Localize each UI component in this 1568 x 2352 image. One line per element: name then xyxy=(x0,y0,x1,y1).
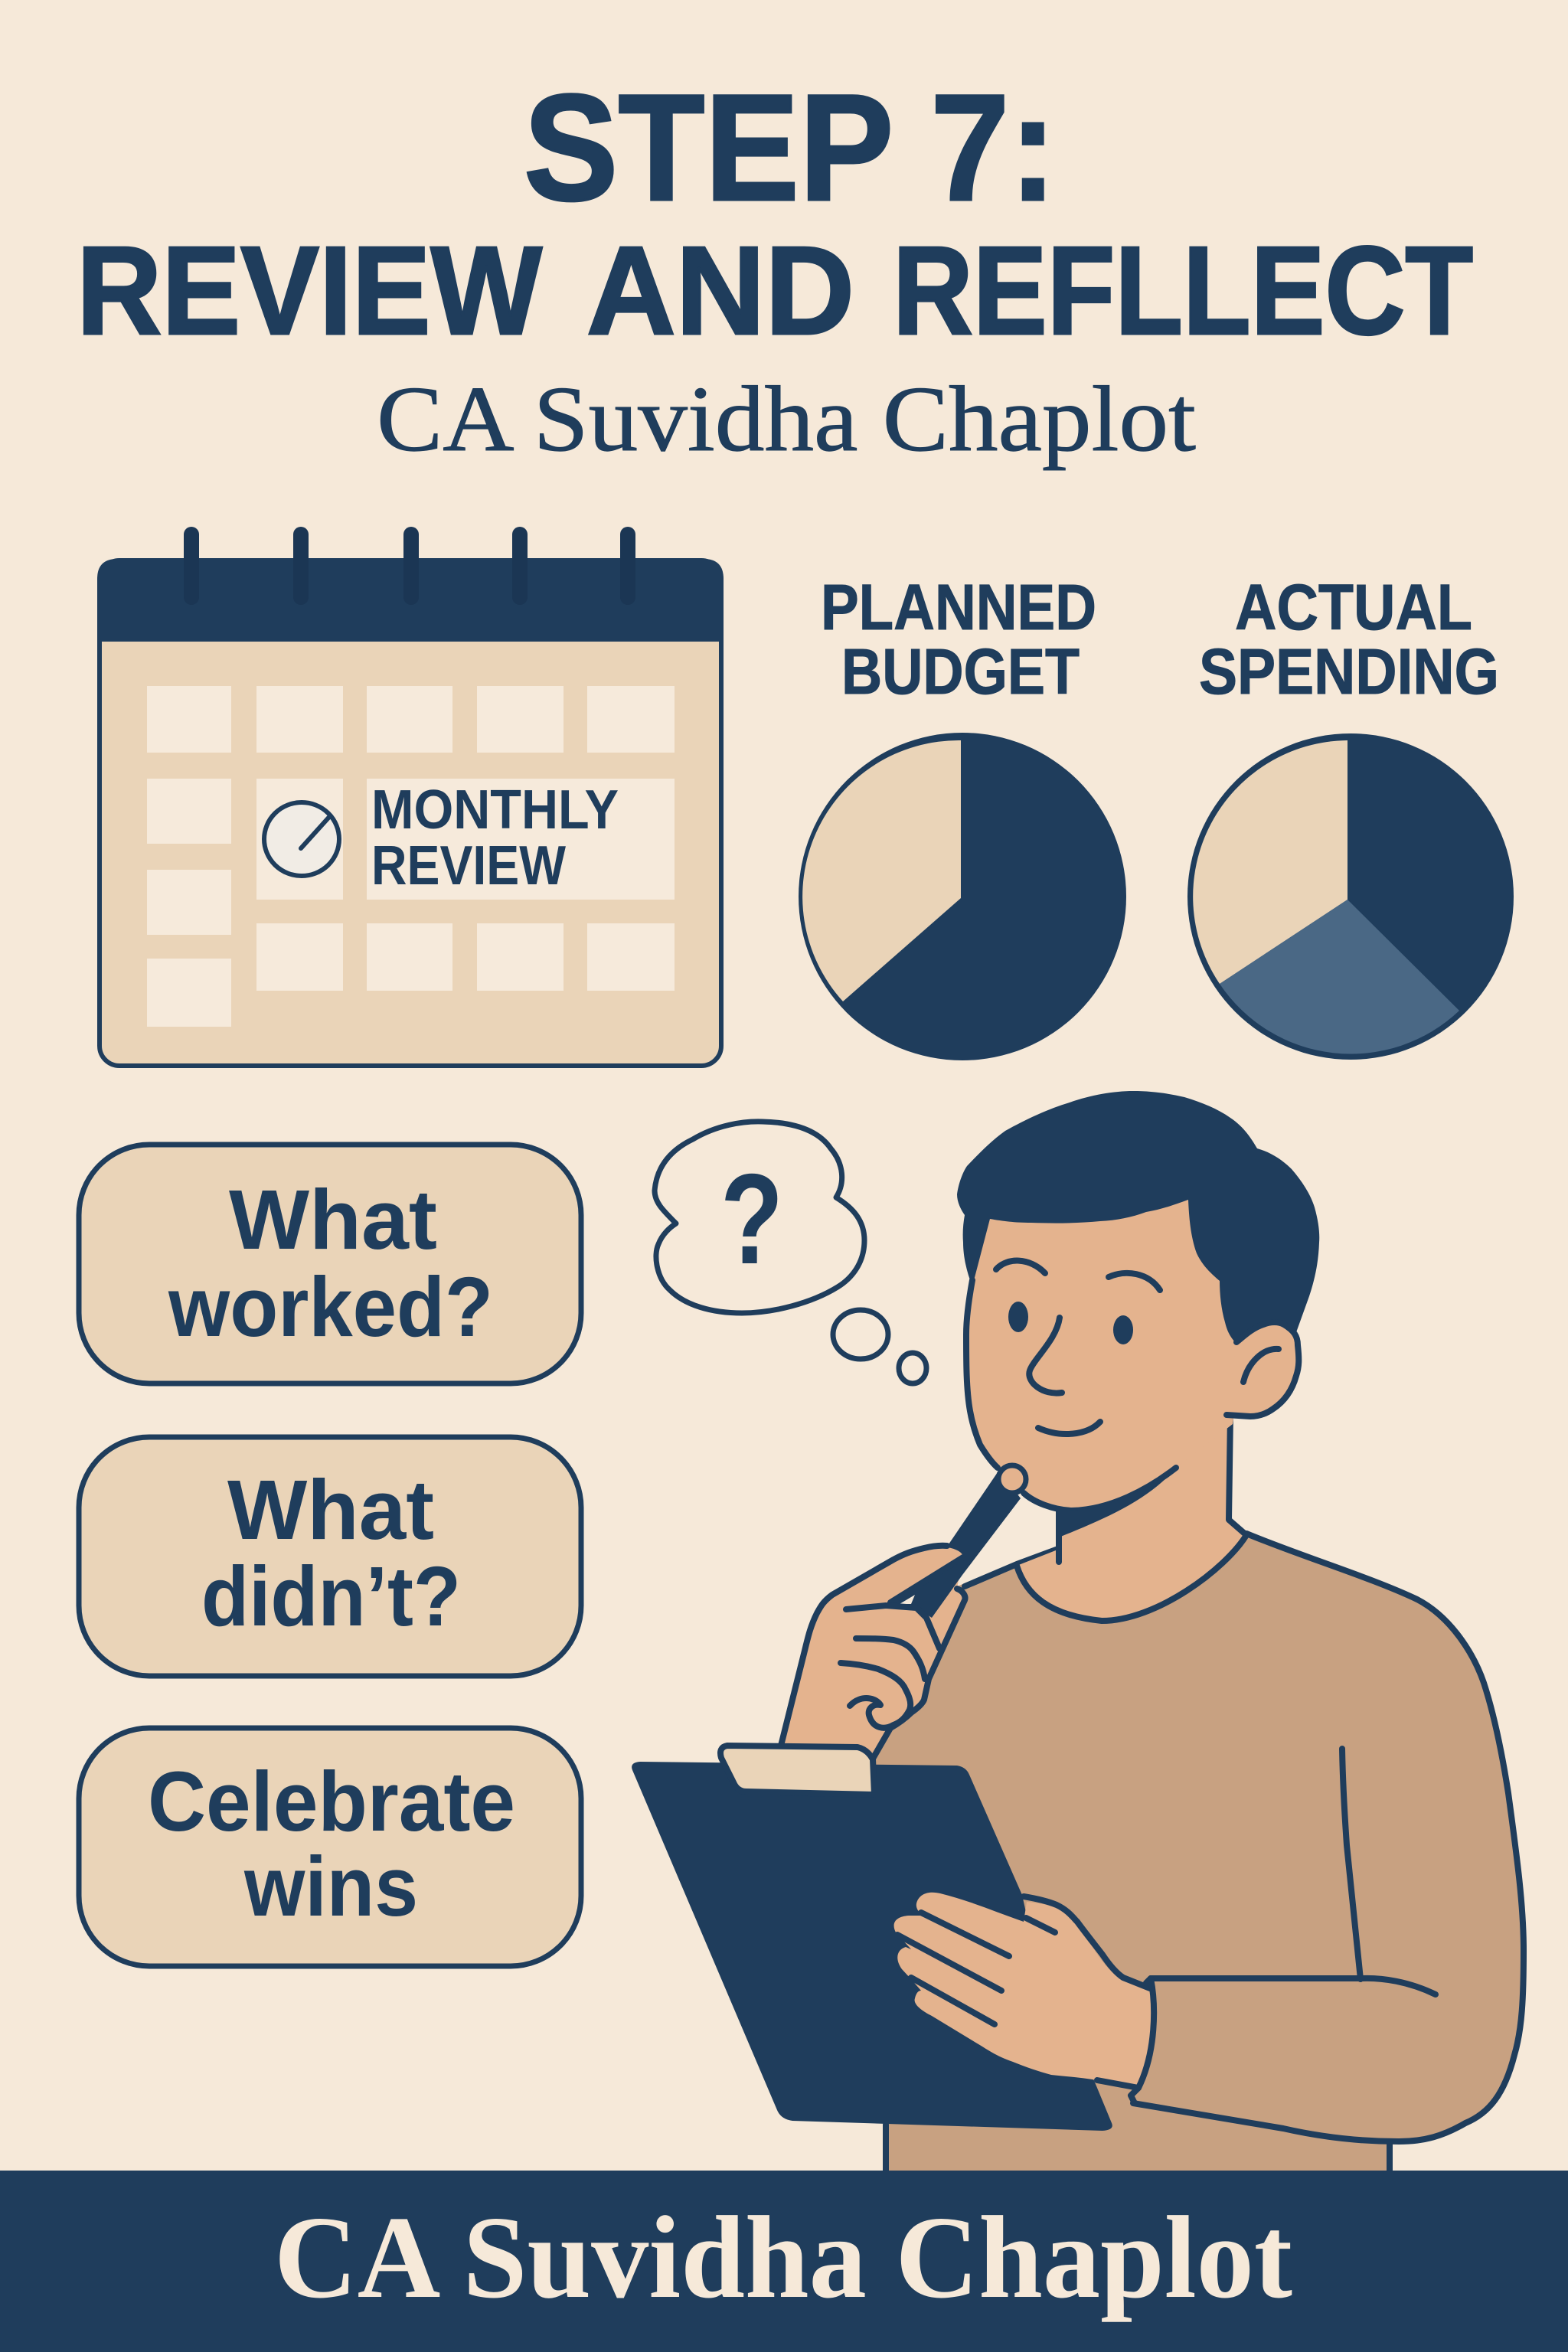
sleeve cuff xyxy=(1131,1978,1154,2103)
callout: what didn't: didn’t? xyxy=(201,1550,461,1644)
title: REFLLECT xyxy=(893,220,1473,361)
clipboard xyxy=(632,1746,1112,2131)
title: AND xyxy=(586,220,854,361)
icon: clock xyxy=(264,802,339,876)
pie chart: actual xyxy=(1187,733,1514,1060)
callout: celebrate wins: Celebrate xyxy=(148,1755,515,1849)
panel: actual spending pie xyxy=(1187,571,1514,1060)
title: REVIEW xyxy=(77,220,542,361)
label: actual spending xyxy=(1199,571,1499,707)
icon: thought bubble with question mark xyxy=(655,1122,926,1383)
pie chart: planned xyxy=(799,733,1126,1060)
ear xyxy=(1227,1322,1298,1416)
neck xyxy=(1017,1378,1246,1621)
calendar binder rings xyxy=(184,527,635,605)
shirt xyxy=(873,1534,1524,2171)
calendar body xyxy=(100,560,721,1066)
face xyxy=(966,1199,1244,1511)
calendar day cells xyxy=(147,686,675,1027)
title: STEP 7: xyxy=(524,63,1057,232)
calendar label: REVIEW xyxy=(371,835,566,897)
callout: what worked xyxy=(79,1145,581,1383)
calendar label xyxy=(371,779,619,897)
eyebrows xyxy=(996,1261,1045,1273)
footer bar: CA Suvidha Chaplot xyxy=(274,2193,1292,2323)
callout: what didn't xyxy=(79,1437,581,1676)
raised hand holding pen xyxy=(781,1465,1026,1759)
panel: monthly review calendar xyxy=(97,527,724,1066)
callout: what worked: What xyxy=(229,1173,437,1267)
subtitle: author name: CA Suvidha Chaplot xyxy=(377,368,1196,471)
label: planned budget: BUDGET xyxy=(841,635,1080,707)
footer bar xyxy=(0,2171,1568,2352)
hair xyxy=(957,1091,1319,1344)
illustration: person reflecting xyxy=(632,1091,1524,2171)
clipboard clip xyxy=(720,1746,874,1795)
hand holding clipboard xyxy=(894,1893,1154,2103)
calendar label: MONTHLY xyxy=(371,779,619,841)
jaw shadow xyxy=(1059,1468,1176,1537)
eyes xyxy=(1008,1302,1028,1332)
label: actual spending: SPENDING xyxy=(1199,635,1499,707)
callout: celebrate wins: wins xyxy=(243,1840,418,1934)
label: planned budget: PLANNED xyxy=(821,571,1096,643)
label: actual spending: ACTUAL xyxy=(1235,571,1472,643)
nose xyxy=(1029,1318,1062,1393)
callout: what didn't: What xyxy=(227,1463,434,1557)
thumb xyxy=(823,1547,963,1612)
panel: planned budget pie xyxy=(799,571,1126,1060)
pen xyxy=(888,1470,1021,1618)
callout: celebrate wins xyxy=(79,1728,581,1966)
label: planned budget xyxy=(821,571,1096,707)
title xyxy=(77,63,1473,361)
calendar header xyxy=(97,559,724,642)
fingers xyxy=(846,1606,939,1648)
mouth xyxy=(1038,1422,1100,1434)
pen tip xyxy=(998,1465,1026,1493)
question mark: ? xyxy=(720,1147,783,1291)
head xyxy=(957,1091,1319,1537)
thought bubbles xyxy=(833,1310,888,1359)
callout: what worked: worked? xyxy=(168,1260,493,1354)
